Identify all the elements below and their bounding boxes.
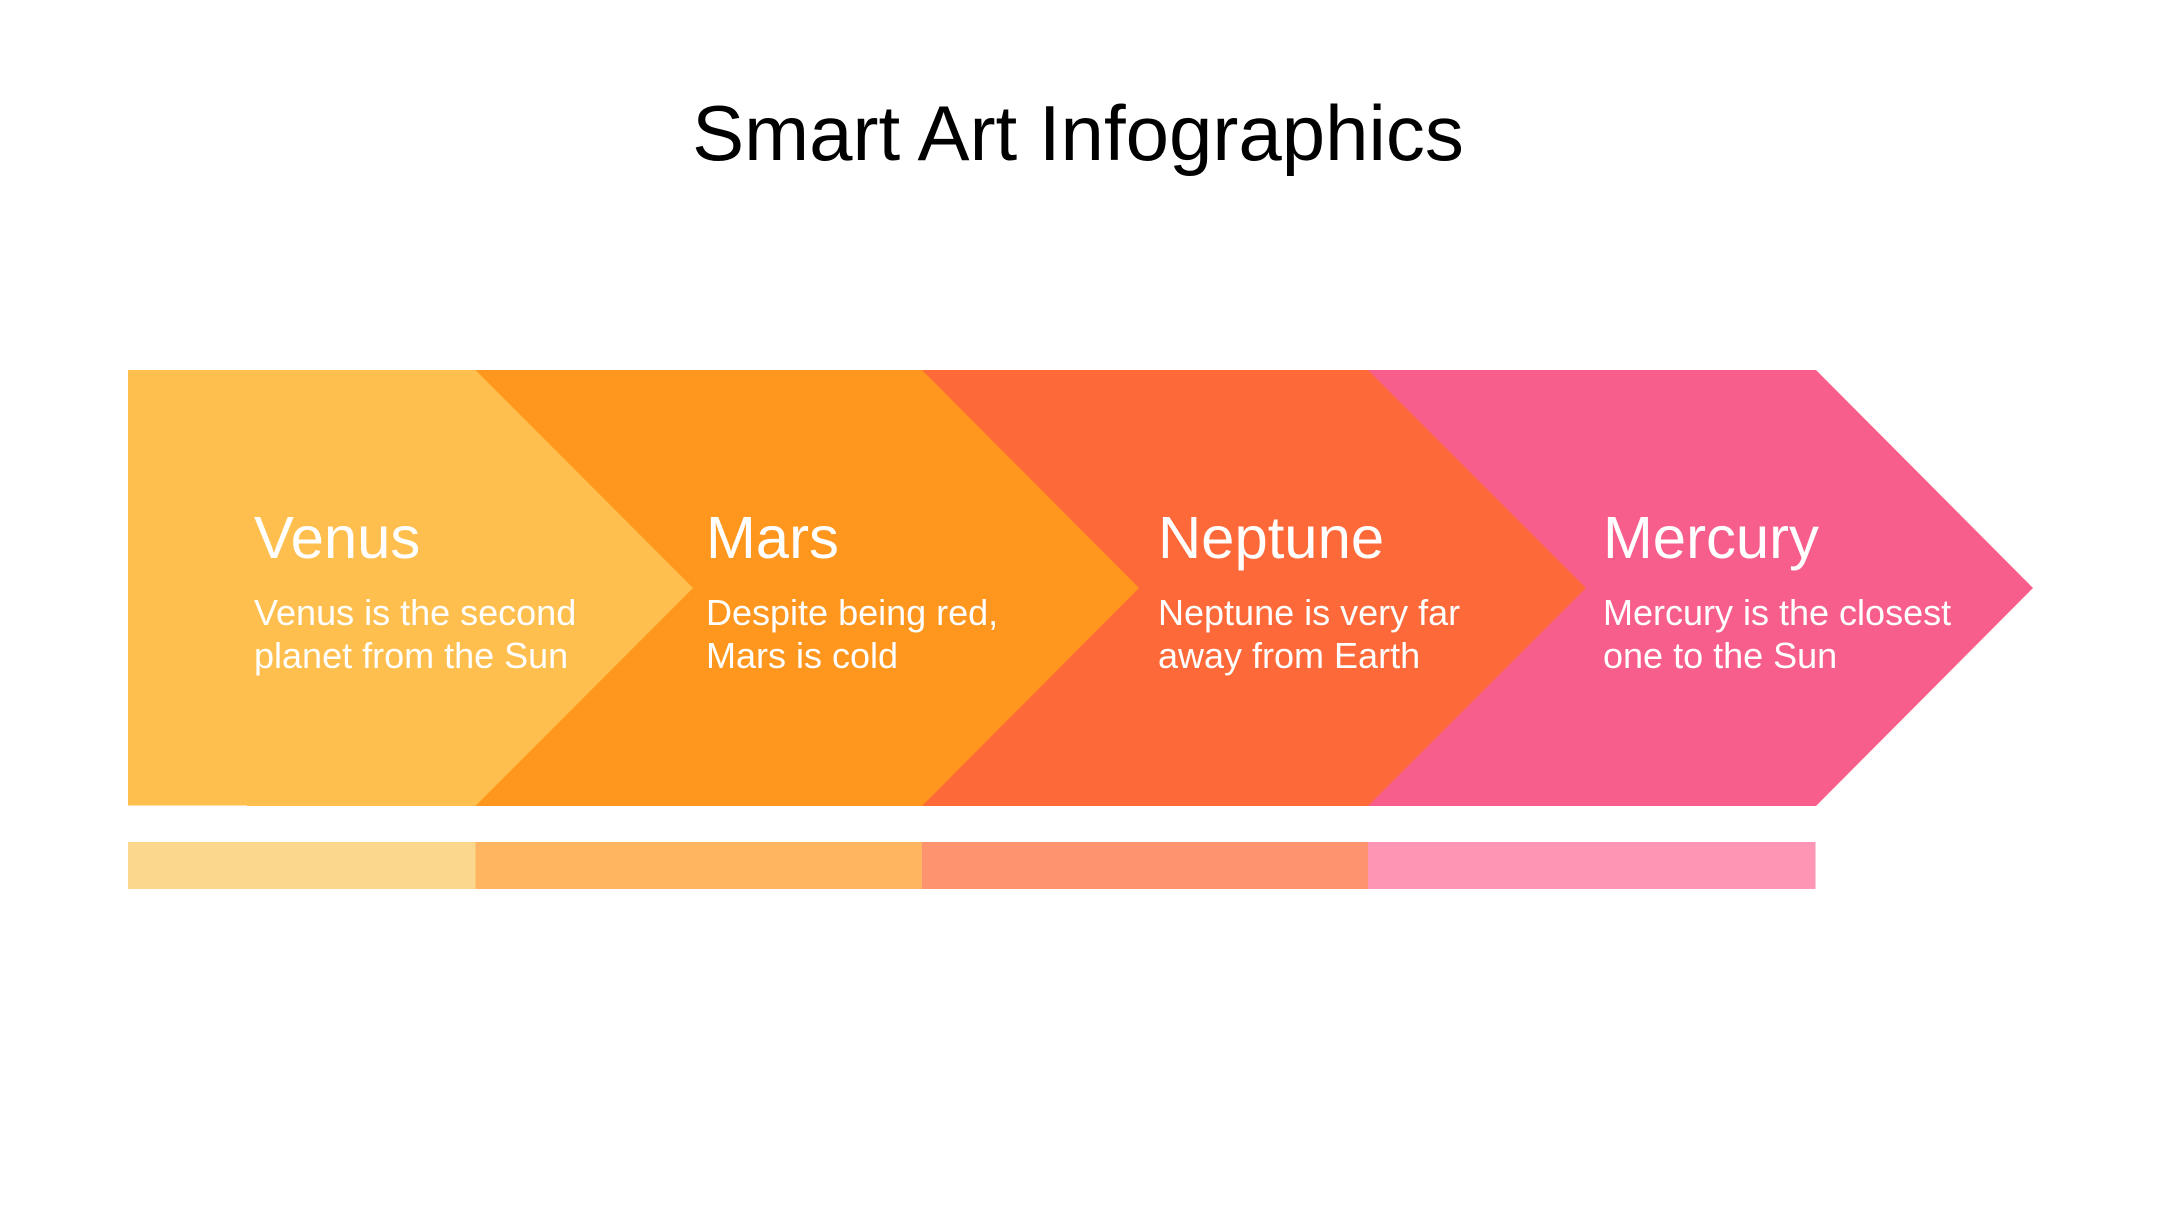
description: Venus: planet from the Sun [254,635,568,676]
description: Mercury: Mercury is the closest [1603,592,1951,633]
chevron: Mercury [1300,370,2033,806]
description: Mercury: one to the Sun [1603,635,1837,676]
progress bar [128,842,1816,889]
description: Mars: Despite being red, [706,592,998,633]
bar segment: Mercury [1368,842,1816,889]
bar segment: Neptune [922,842,1368,889]
heading: Mars: Mars [706,504,839,571]
panel: Venus text [254,504,576,676]
panel: Neptune text [1158,504,1460,676]
description: Neptune: away from Earth [1158,635,1420,676]
chevron: Venus [128,370,693,806]
panel: Mercury text [1603,504,1951,676]
title: Smart Art Infographics [692,89,1464,177]
description: Neptune: Neptune is very far [1158,592,1460,633]
chevron: Neptune [800,370,1586,806]
panel: Mars text [706,504,998,676]
panel: arrow chevron process [128,370,2033,806]
description: Venus: Venus is the second [254,592,576,633]
bar segment: Mars [476,842,922,889]
chevron: Mars [400,370,1139,806]
heading: Neptune: Neptune [1158,504,1384,571]
heading: Mercury: Mercury [1603,504,1819,571]
description: Mars: Mars is cold [706,635,898,676]
bar segment: Venus [128,842,476,889]
heading: Venus: Venus [254,504,420,571]
